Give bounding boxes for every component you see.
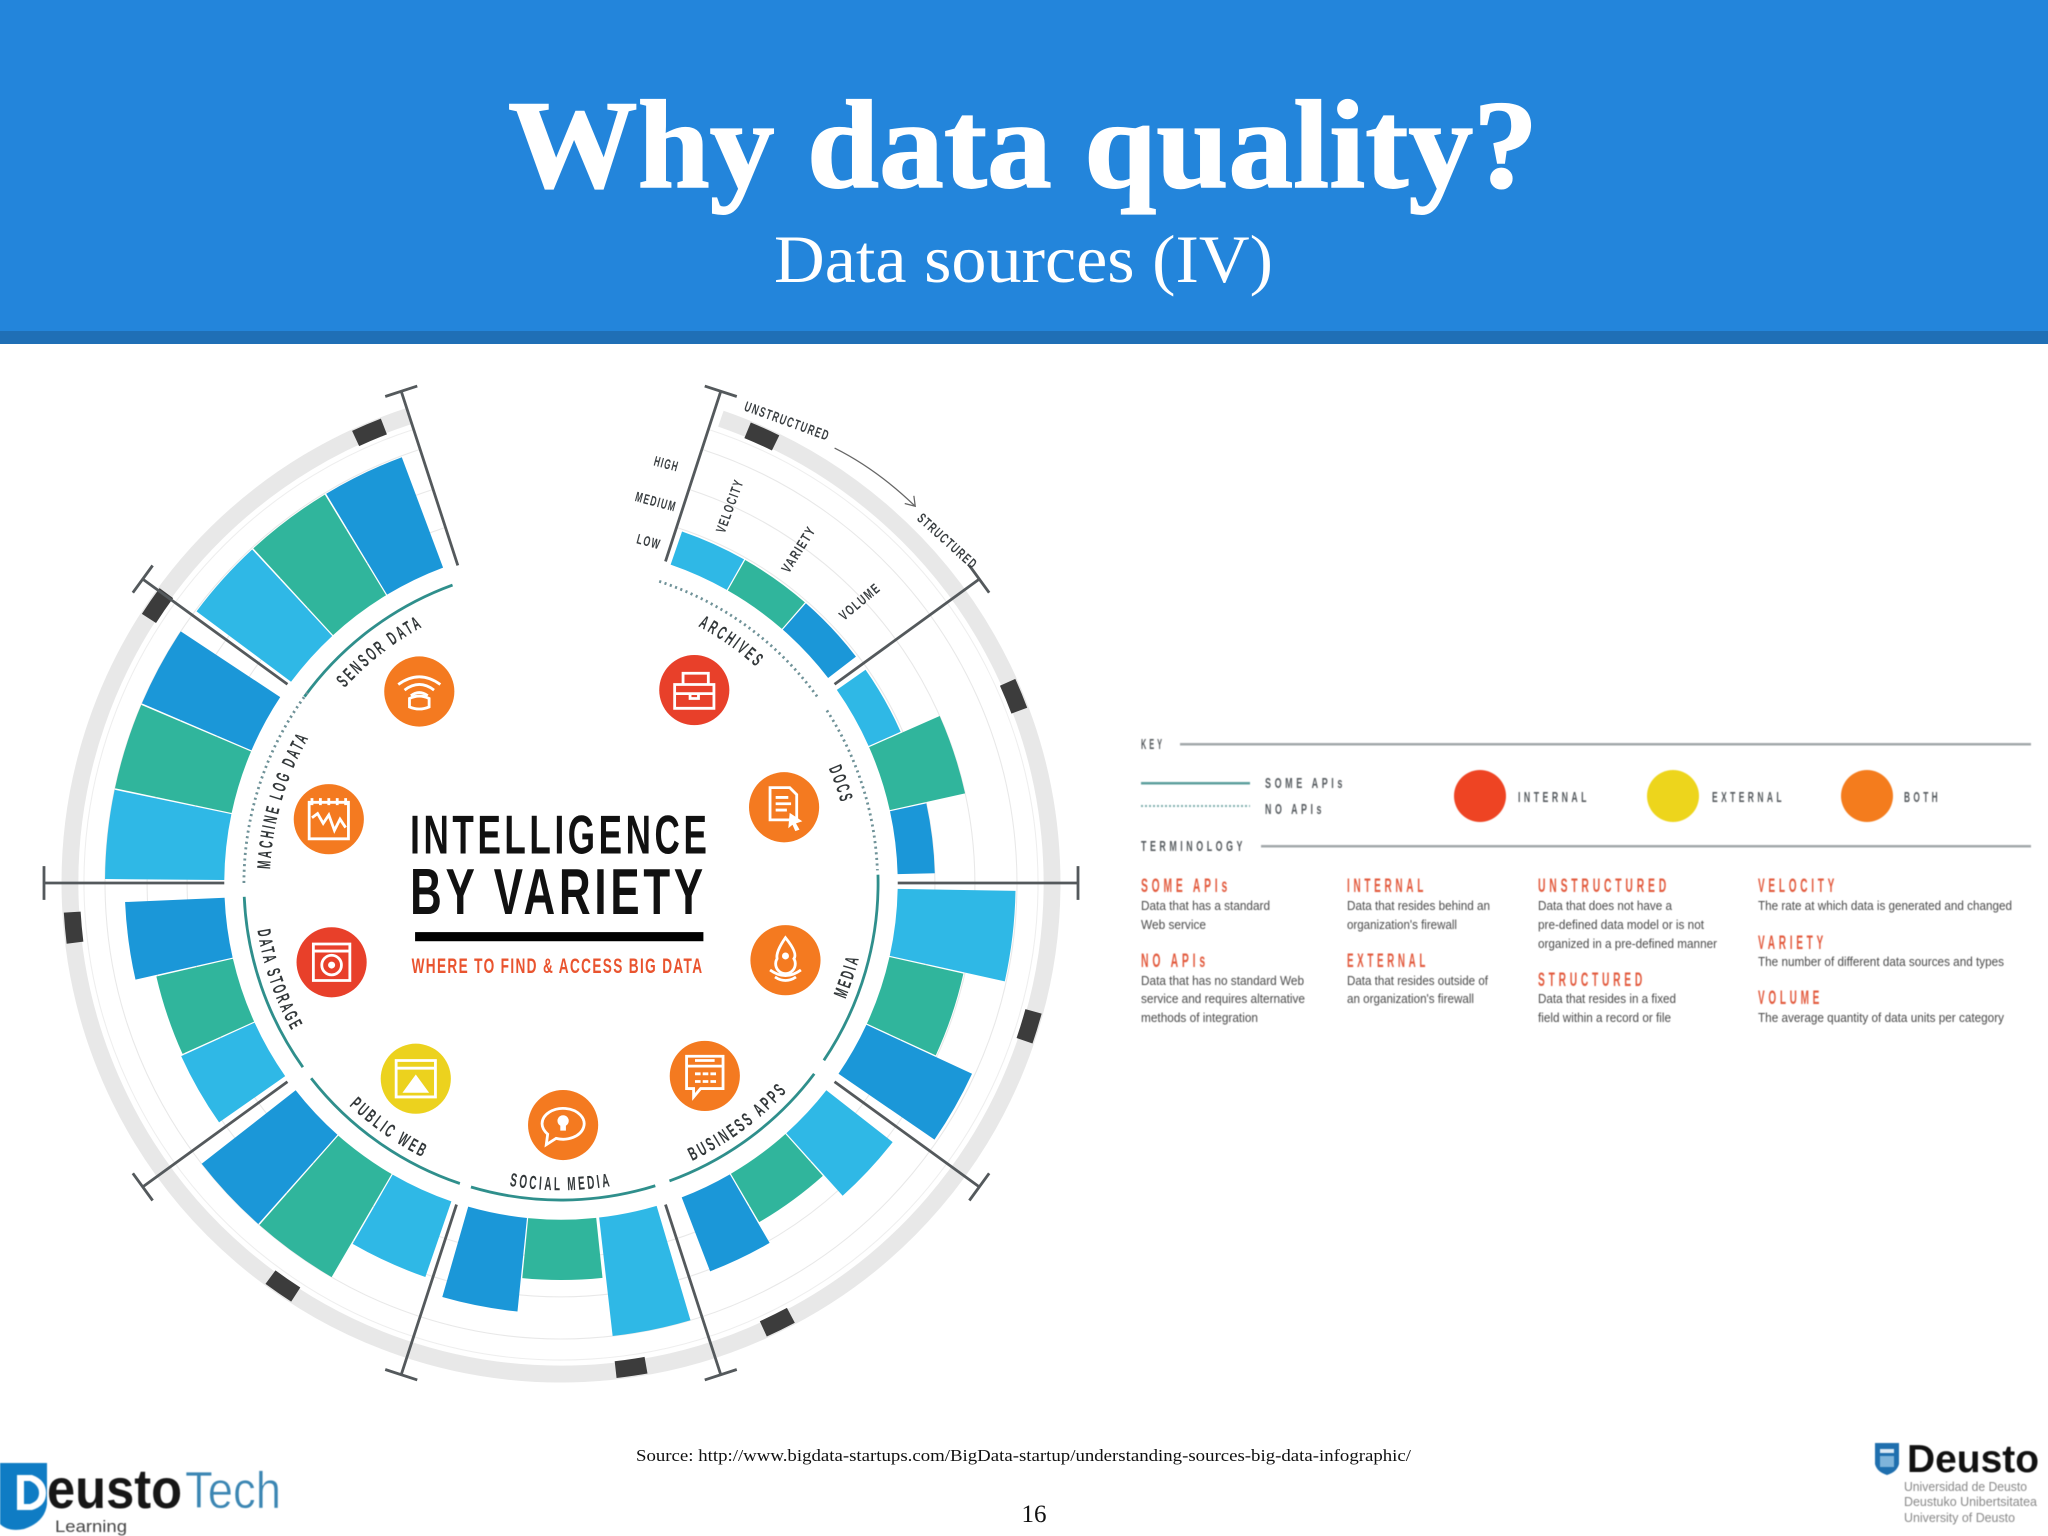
icon: archives	[659, 655, 729, 725]
term: structured: field within a record or file	[1538, 1011, 1671, 1025]
term: unstructured: organized in a pre-defined manner	[1538, 937, 1717, 951]
term: velocity	[1758, 876, 2012, 913]
scale labels: MEDIUM	[634, 488, 678, 515]
logo: deustotech learning: eusto	[47, 1457, 182, 1520]
logo: universidad de deusto	[1875, 1438, 2039, 1525]
label: archives: ARCHIVES	[698, 616, 763, 666]
internal key: INTERNAL	[1518, 789, 1590, 806]
label: docs: DOCS	[828, 764, 852, 801]
logo: universidad de deusto: Deusto	[1907, 1438, 2039, 1481]
bars: docs	[66, 388, 1056, 1378]
term: some apis: Web service	[1141, 918, 1206, 932]
center subtitle: WHERE TO FIND & ACCESS BIG DATA	[412, 955, 703, 978]
center heading: INTELLIGENCE	[410, 804, 710, 866]
scale labels	[634, 453, 681, 552]
icon: data storage	[297, 927, 367, 997]
icon: social media	[528, 1090, 598, 1160]
label: data storage: DATA STORAGE	[258, 928, 302, 1030]
term: internal: organization's firewall	[1347, 918, 1457, 932]
icon: media	[750, 925, 821, 995]
key and terminology legend	[1141, 736, 2031, 1025]
external key: EXTERNAL	[1712, 789, 1785, 806]
term: some apis: SOME APIs	[1141, 876, 1231, 897]
term: unstructured: Data that does not have a	[1538, 899, 1672, 913]
subtitle: Data sources (IV)	[774, 221, 1273, 297]
term: internal	[1347, 876, 1490, 932]
term: structured: Data that resides in a fixed	[1538, 992, 1676, 1006]
label: sensor data: SENSOR DATA	[336, 617, 422, 687]
label: public web: PUBLIC WEB	[350, 1096, 426, 1156]
term: velocity: The rate at which data is generated and changed	[1758, 899, 2012, 913]
center rule	[415, 932, 703, 941]
bars: media	[36, 358, 1086, 1408]
label: business apps: BUSINESS APPS	[687, 1084, 786, 1161]
term: external: EXTERNAL	[1347, 951, 1429, 972]
dotted no-API arcs	[244, 581, 877, 883]
icon: public web	[381, 1044, 451, 1114]
logo: universidad de deusto: Universidad de Deusto	[1904, 1479, 2027, 1494]
center heading: BY VARIETY	[410, 856, 707, 928]
term: unstructured: pre-defined data model or is not	[1538, 918, 1704, 932]
icon: docs	[749, 772, 819, 842]
scale labels: LOW	[635, 531, 663, 552]
radial chart: intelligence by variety	[42, 384, 1080, 1382]
term: external: Data that resides outside of	[1347, 974, 1488, 988]
external key	[1647, 770, 1785, 822]
bars: public web	[1, 323, 1121, 1443]
bars: data storage	[36, 358, 1086, 1408]
logo: universidad de deusto: Deustuko Unibertsitatea	[1904, 1494, 2038, 1509]
term: no apis	[1141, 951, 1305, 1025]
internal key	[1454, 770, 1590, 822]
term: no apis: Data that has no standard Web	[1141, 974, 1304, 988]
bars: machine log data	[41, 363, 1081, 1403]
dark ring markers	[0, 206, 1238, 1536]
term: external	[1347, 951, 1488, 1006]
header band	[0, 0, 2048, 344]
term: volume: The average quantity of data units per category	[1758, 1011, 2005, 1025]
bars: archives	[61, 383, 1061, 1383]
some apis key: SOME APIs	[1265, 775, 1346, 792]
outer gray ring	[0, 259, 1185, 1507]
icon: machine log data	[294, 784, 364, 854]
logo: deustotech learning	[0, 1457, 281, 1536]
both key: BOTH	[1904, 789, 1941, 806]
term: internal: Data that resides behind an	[1347, 899, 1490, 913]
icon: sensor data	[384, 656, 454, 727]
term: variety	[1758, 933, 2004, 969]
term: structured	[1538, 970, 1676, 1025]
dimension labels: VOLUME	[836, 579, 884, 623]
term: volume	[1758, 988, 2005, 1025]
icon: business apps	[670, 1041, 740, 1111]
center heading	[410, 804, 710, 928]
both key	[1841, 770, 1941, 822]
dimension labels: VELOCITY	[712, 477, 747, 535]
key heading: KEY	[1141, 736, 1165, 753]
term: some apis	[1141, 876, 1270, 932]
title: Why data quality?	[508, 76, 1538, 215]
label: social media: SOCIAL MEDIA	[510, 1173, 610, 1190]
terminology heading: TERMINOLOGY	[1141, 838, 1246, 855]
term: internal: INTERNAL	[1347, 876, 1427, 897]
dimension labels	[712, 477, 884, 623]
term: no apis: NO APIs	[1141, 951, 1209, 972]
page number: 16	[1022, 1501, 1046, 1528]
term: no apis: methods of integration	[1141, 1011, 1258, 1025]
label: machine log data: MACHINE LOG DATA	[257, 734, 308, 869]
term: no apis: service and requires alternative	[1141, 992, 1305, 1006]
term: volume: VOLUME	[1758, 988, 1823, 1009]
term: unstructured	[1538, 876, 1717, 951]
bars: business apps	[29, 351, 1093, 1415]
term: velocity: VELOCITY	[1758, 876, 1838, 897]
term: unstructured: UNSTRUCTURED	[1538, 876, 1670, 897]
bars: social media	[68, 390, 1054, 1376]
bars: sensor data	[2, 324, 1120, 1442]
segment labels	[257, 616, 859, 1190]
source line: Source: http://www.bigdata-startups.com/BigData-startup/understanding-sources-big-data-infographic/	[636, 1446, 1411, 1465]
scale labels: HIGH	[652, 453, 681, 475]
arrow: unstructured to structured	[835, 448, 915, 506]
dimension labels: VARIETY	[778, 523, 819, 575]
logo: deustotech learning: Learning	[55, 1517, 127, 1536]
separator lines with end caps	[44, 386, 1078, 1380]
logo: deustotech learning: Tech	[185, 1462, 281, 1520]
logo: universidad de deusto: University of Deusto	[1904, 1510, 2015, 1525]
label: media: MEDIA	[834, 958, 859, 999]
term: variety: VARIETY	[1758, 933, 1827, 954]
no apis key: NO APIs	[1265, 801, 1325, 818]
solid API arcs	[117, 439, 1005, 1327]
unstructured label: UNSTRUCTURED	[742, 398, 832, 444]
term: variety: The number of different data sources and types	[1758, 955, 2004, 969]
term: structured: STRUCTURED	[1538, 970, 1646, 991]
term: external: an organization's firewall	[1347, 992, 1474, 1006]
term: some apis: Data that has a standard	[1141, 899, 1270, 913]
structured label: STRUCTURED	[914, 510, 981, 572]
